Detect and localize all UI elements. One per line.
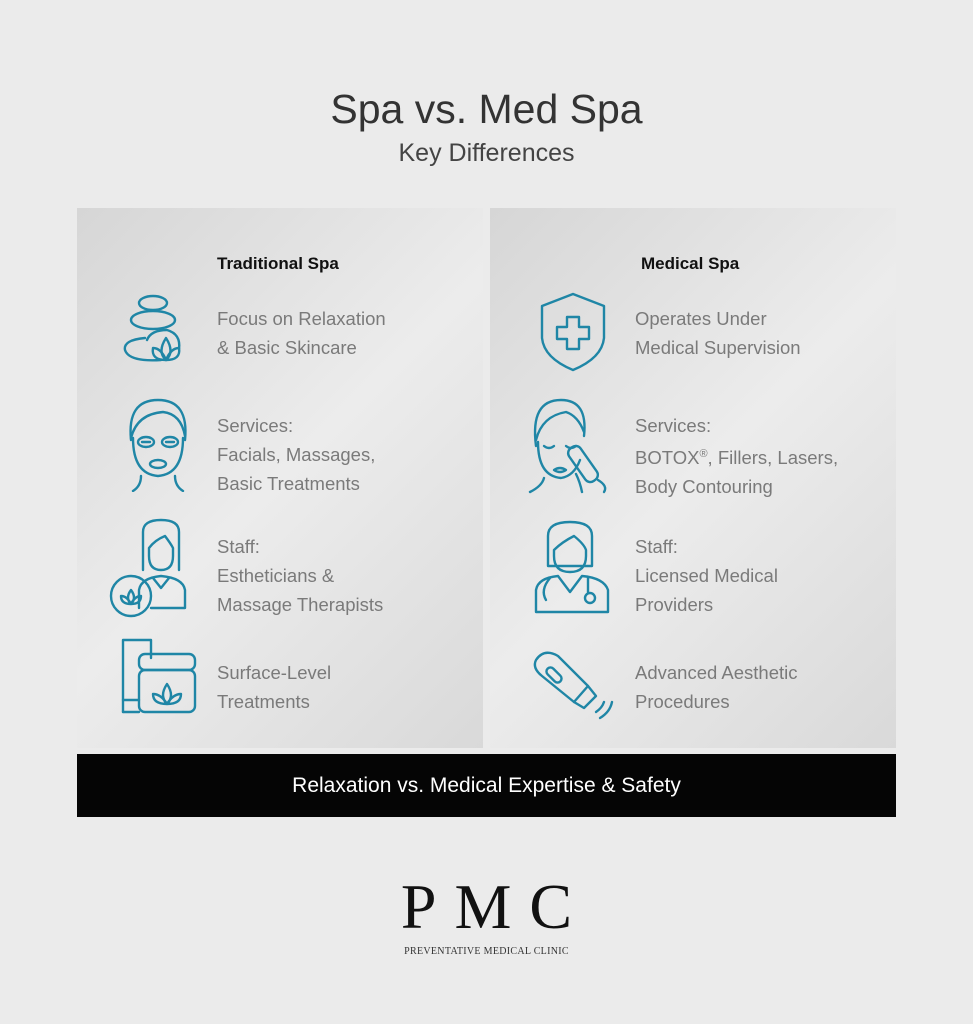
text: Services: bbox=[217, 415, 293, 436]
text bbox=[217, 662, 331, 712]
logo: PMC bbox=[401, 871, 590, 942]
text bbox=[635, 415, 838, 497]
heading: Traditional Spa bbox=[217, 254, 339, 273]
text: Procedures bbox=[635, 691, 730, 712]
icon: stones bbox=[124, 294, 180, 362]
icon: esthetician bbox=[110, 518, 186, 618]
text bbox=[217, 308, 386, 358]
text: Staff: bbox=[635, 536, 678, 557]
text: Operates Under bbox=[635, 308, 767, 329]
text: & Basic Skincare bbox=[217, 337, 357, 358]
panel: medical spa bbox=[490, 208, 896, 748]
text: Treatments bbox=[217, 691, 310, 712]
text: Advanced Aesthetic bbox=[635, 662, 798, 683]
banner bbox=[77, 754, 896, 817]
title: Spa vs. Med Spa bbox=[330, 86, 643, 132]
text: Estheticians & bbox=[217, 565, 334, 586]
heading: Medical Spa bbox=[641, 254, 739, 273]
text: Providers bbox=[635, 594, 713, 615]
icon: device bbox=[534, 652, 614, 720]
text: BOTOX®, Fillers, Lasers, bbox=[635, 447, 838, 468]
text bbox=[217, 415, 375, 494]
text: Services: bbox=[635, 415, 711, 436]
text: Surface-Level bbox=[217, 662, 331, 683]
text bbox=[217, 536, 383, 615]
text: Facials, Massages, bbox=[217, 444, 375, 465]
subtitle: Key Differences bbox=[398, 139, 574, 167]
text: Basic Treatments bbox=[217, 473, 360, 494]
text bbox=[635, 536, 778, 615]
icon: doctor bbox=[534, 520, 610, 614]
text: Licensed Medical bbox=[635, 565, 778, 586]
icon: skincare jar bbox=[122, 638, 196, 714]
text: Body Contouring bbox=[635, 476, 773, 497]
icon: shield cross bbox=[540, 292, 606, 372]
text: Focus on Relaxation bbox=[217, 308, 386, 329]
icon: face with laser bbox=[528, 398, 606, 494]
panel: traditional spa bbox=[77, 208, 483, 748]
text: Medical Supervision bbox=[635, 337, 801, 358]
banner: Relaxation vs. Medical Expertise & Safety bbox=[292, 774, 681, 797]
text bbox=[635, 662, 798, 712]
text bbox=[635, 308, 801, 358]
icon: face mask bbox=[129, 398, 187, 492]
logo: PREVENTATIVE MEDICAL CLINIC bbox=[404, 946, 569, 957]
text: Staff: bbox=[217, 536, 260, 557]
text: Massage Therapists bbox=[217, 594, 383, 615]
